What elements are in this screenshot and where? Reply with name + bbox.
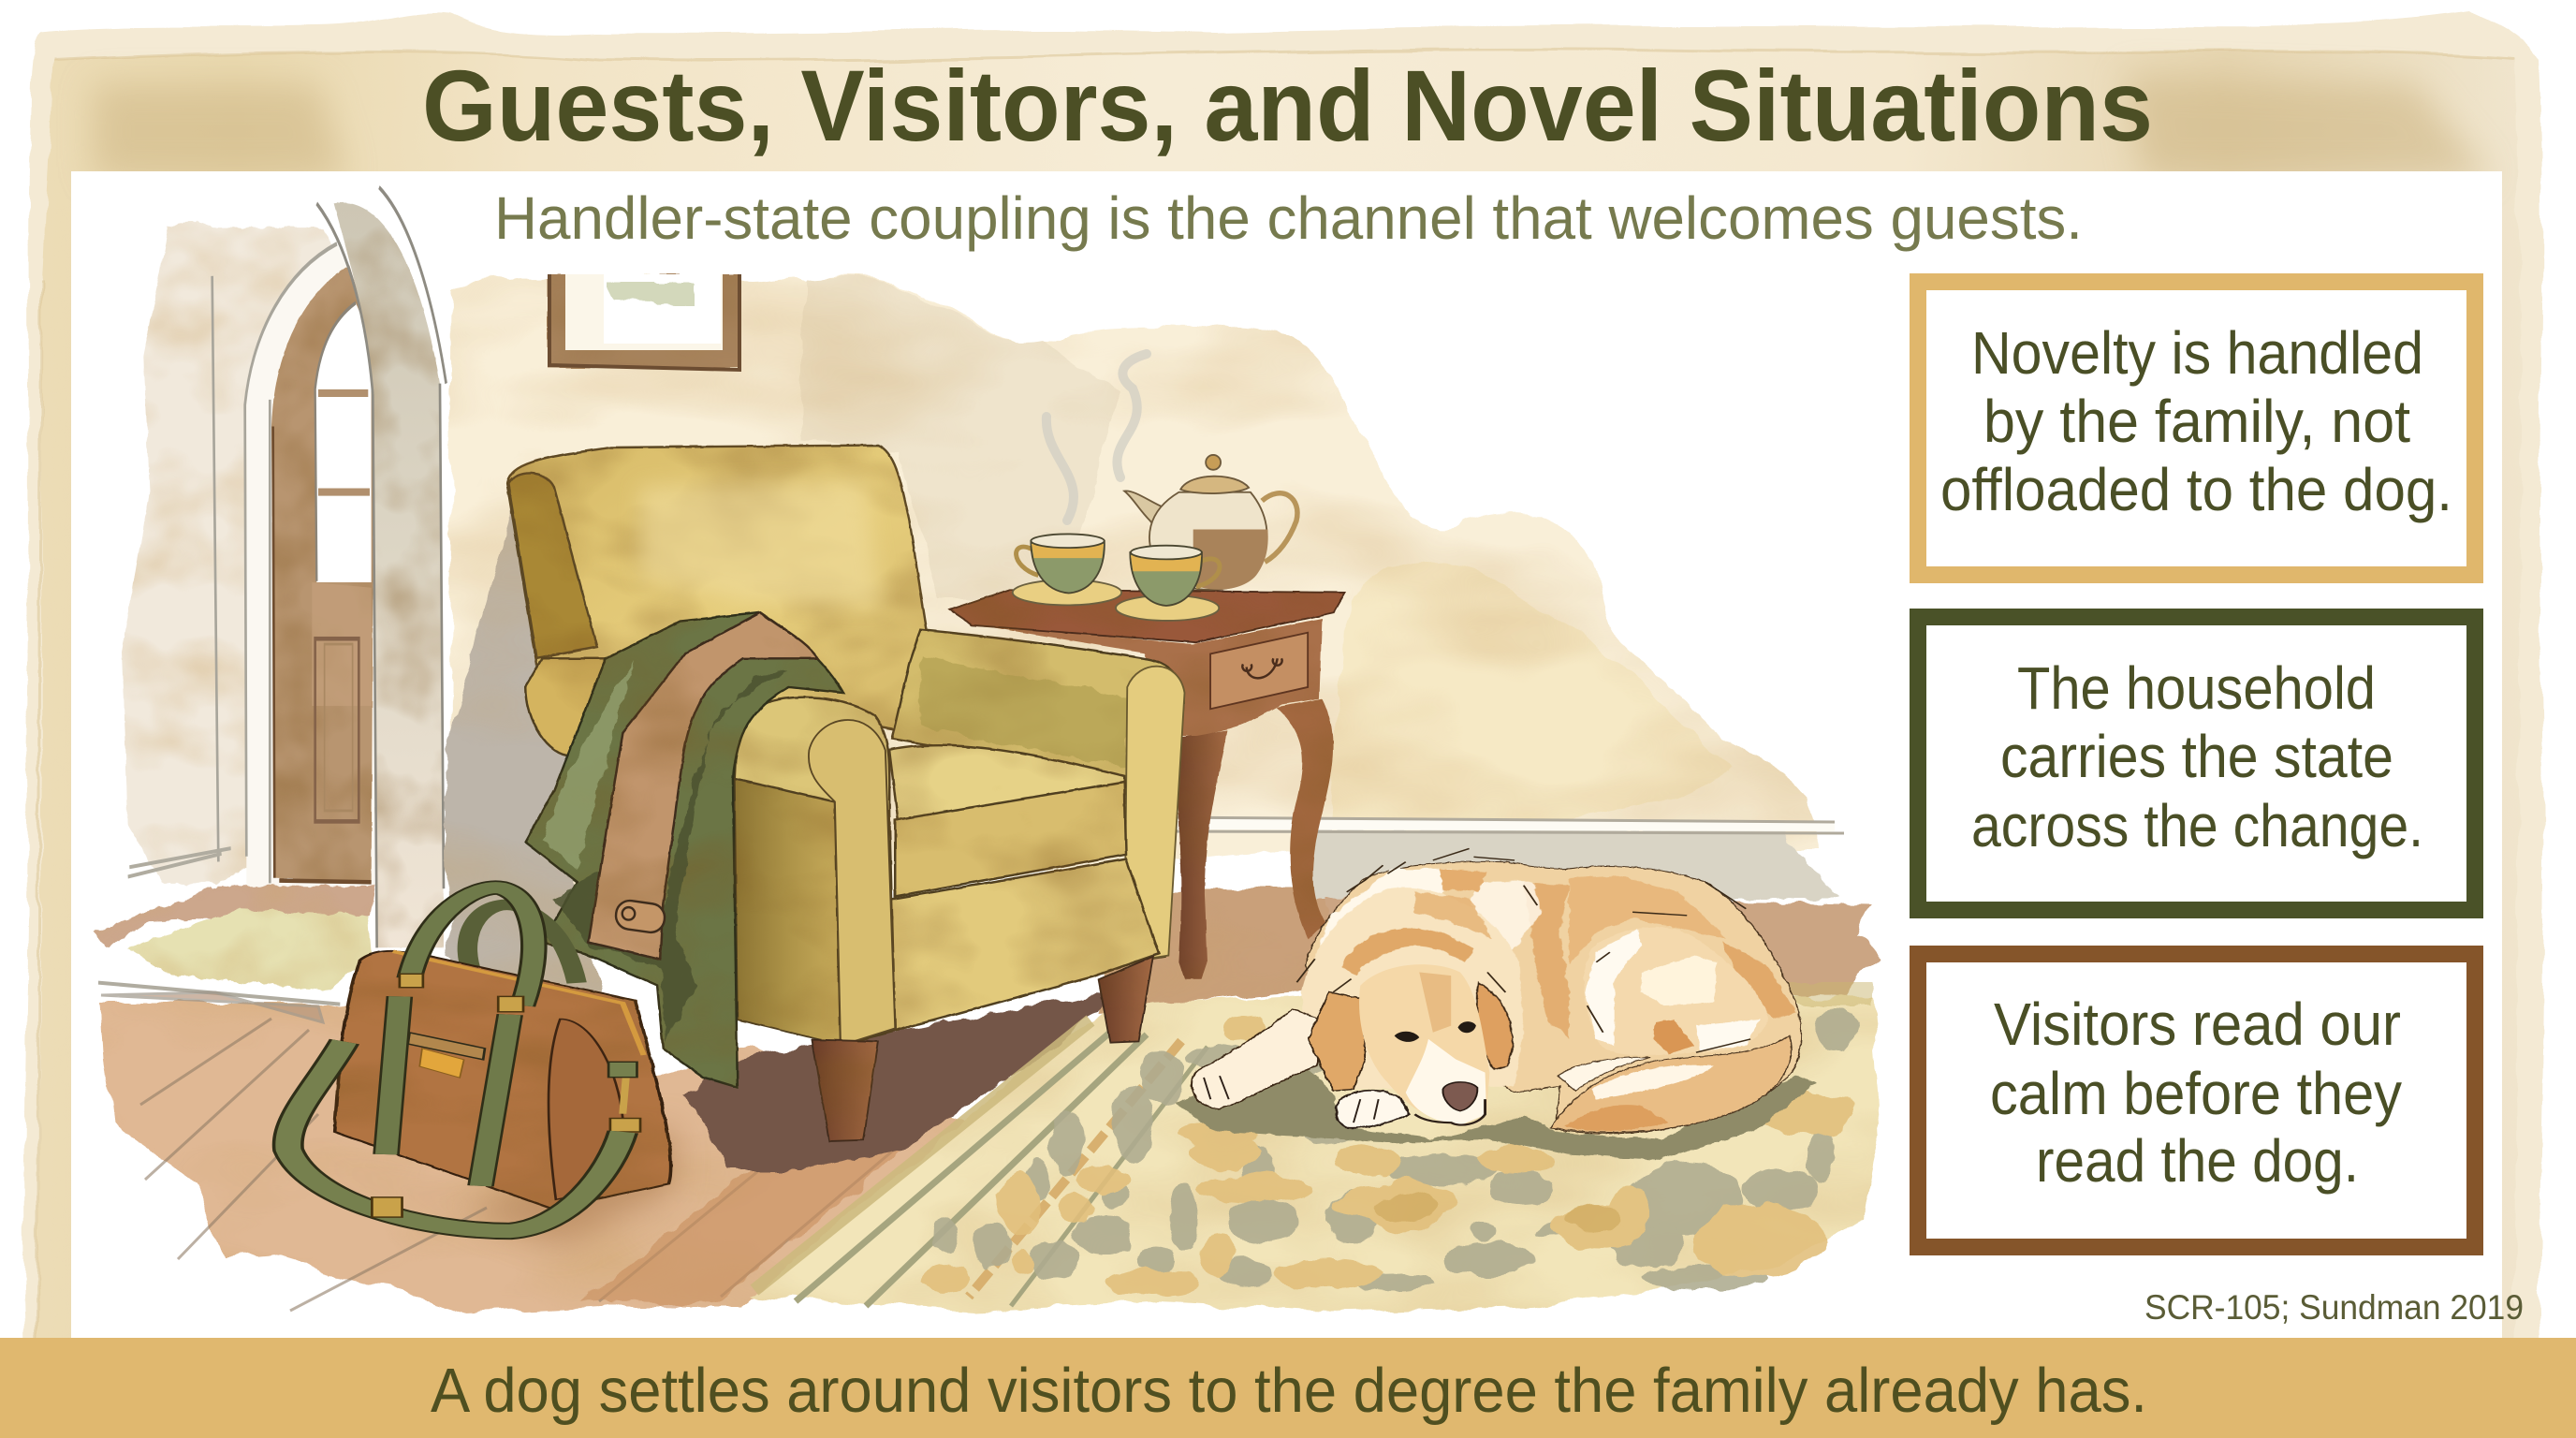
- callout: visitors read our calm: Visitors read our: [1994, 990, 2401, 1058]
- dog nose and mouth: [1442, 1082, 1477, 1111]
- dark throw folds: [554, 670, 789, 1043]
- dog right ear: [1477, 982, 1513, 1069]
- doorway with arched door and window: [94, 187, 446, 1005]
- bag green straps: [387, 996, 510, 1186]
- shoulder strap: [288, 1042, 622, 1231]
- chair back highlight: [640, 480, 881, 607]
- table apron and drawer: [973, 618, 1322, 736]
- dog left foreleg: [1192, 1009, 1320, 1108]
- callout: household carries the state: [1918, 617, 2475, 910]
- teapot: [1124, 455, 1297, 590]
- yellow armchair: [507, 446, 1185, 1141]
- subtitle: Handler-state coupling is the channel that welcomes guests.: [494, 184, 2083, 252]
- rug shadow under dog: [1175, 1059, 1816, 1159]
- open door slab: [334, 202, 444, 947]
- leather travel bag: [288, 888, 671, 1231]
- callout: novelty handled by family: by the family, not: [1983, 388, 2410, 455]
- bag front handle: [410, 888, 534, 1005]
- callout: visitors read our calm: calm before they: [1990, 1060, 2402, 1127]
- dog tail: [1551, 1035, 1792, 1133]
- chair left side panel: [735, 779, 843, 1046]
- source citation: SCR-105; Sundman 2019: [2144, 1288, 2524, 1327]
- dog hindquarter: [1584, 927, 1768, 1055]
- chair lower front: [835, 859, 1159, 1046]
- bag zipper: [393, 951, 644, 1055]
- callout: visitors read our calm: read the dog.: [2036, 1127, 2359, 1195]
- draped jacket and throw: [525, 612, 843, 1087]
- callout: household carries the state: The household: [2017, 654, 2376, 722]
- golden retriever lying on rug: [1175, 848, 1816, 1159]
- dog body: [1306, 861, 1801, 1134]
- callout: novelty handled by family: Novelty is handled: [1971, 319, 2423, 387]
- grey wall shadow behind chair: [446, 468, 599, 1123]
- chair seat cushion: [889, 745, 1124, 820]
- watercolor illustration: guest room with resting dog: [94, 187, 1881, 1313]
- patterned rug: [749, 983, 1881, 1311]
- callout: novelty handled by family: offloaded to the dog.: [1940, 456, 2452, 523]
- bottom takeaway banner: A dog settles around visitors to the degree the family already has.: [431, 1356, 2147, 1426]
- steam above cups: [1046, 354, 1147, 521]
- dog hind paw: [1558, 1057, 1650, 1091]
- chair left wing: [508, 473, 597, 658]
- callout: visitors read our calm: [1918, 954, 2475, 1247]
- white content panel: [71, 171, 2502, 1338]
- dog face: [1359, 964, 1489, 1126]
- dog left ear: [1309, 992, 1365, 1091]
- bottom takeaway banner: [0, 1338, 2576, 1438]
- dog fur patches: [1315, 869, 1796, 1039]
- chair near arm: [735, 697, 895, 1046]
- right floor and baseboard: [1161, 817, 1880, 1000]
- saucers and teacups: [1013, 534, 1220, 621]
- dog mane and head: [1301, 888, 1524, 1089]
- callout: novelty handled by family: [1918, 282, 2475, 575]
- chair left arm behind throw: [525, 658, 611, 756]
- callout: household carries the state: carries the state: [2000, 723, 2393, 790]
- side table: [949, 455, 1345, 979]
- bag pocket and label: [408, 1033, 485, 1060]
- bag end panel: [549, 1019, 622, 1199]
- brown jacket: [589, 612, 818, 960]
- chair back: [507, 446, 927, 733]
- dog back fur strokes: [1296, 848, 1750, 1052]
- back handle: [467, 904, 577, 983]
- wood floor: [99, 889, 1376, 1313]
- bag body: [334, 951, 671, 1209]
- chair far arm: [892, 630, 1183, 962]
- dog eyes: [1395, 1032, 1419, 1042]
- chair legs: [812, 1040, 878, 1141]
- callout: household carries the state: across the change.: [1971, 792, 2423, 859]
- green throw: [525, 612, 843, 1087]
- table top: [949, 590, 1345, 642]
- hallway floor: [94, 886, 374, 947]
- gold buckles: [400, 974, 640, 1132]
- wall picture frame: [548, 274, 739, 370]
- main title: Guests, Visitors, and Novel Situations: [422, 49, 2153, 162]
- wall wash: [449, 276, 1817, 936]
- door window: [315, 303, 372, 582]
- table legs: [1170, 698, 1333, 979]
- dog front paw: [1336, 1091, 1410, 1128]
